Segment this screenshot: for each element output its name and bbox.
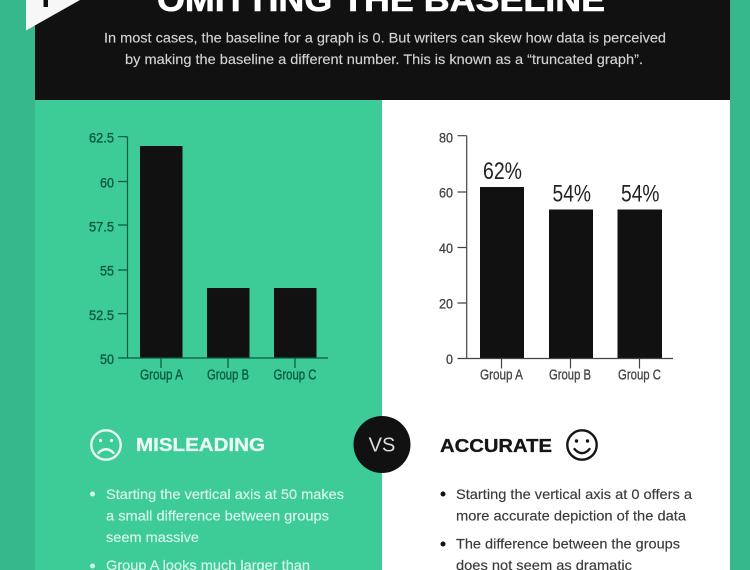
panel: header: [35, 0, 730, 100]
text block: intro: [104, 30, 666, 67]
bar chart: zero baseline: 20: [439, 296, 453, 312]
text block: accurate bullets: more accurate depiction of the data: [456, 508, 686, 524]
text block: misleading bullets: seem massive: [106, 529, 199, 545]
bar chart: zero baseline: 80: [439, 130, 453, 146]
icon: number ribbon: [26, 0, 80, 30]
text block: misleading bullets: [90, 486, 344, 570]
panel: accurate: [382, 100, 730, 570]
heading: misleading: MISLEADING: [136, 435, 265, 455]
bar chart: zero baseline: Group C: [618, 366, 661, 384]
bar chart: zero baseline: 54%: [621, 180, 660, 208]
bar chart: zero baseline: [439, 130, 673, 384]
text block: accurate bullets: [440, 486, 692, 570]
bar chart: truncated baseline: 55: [100, 263, 114, 279]
bar chart: truncated baseline: 57.5: [89, 218, 114, 234]
bar chart: zero baseline: Group B: [549, 366, 591, 384]
badge: vs: [354, 416, 410, 473]
icon: sad face: [91, 430, 121, 460]
panel: misleading: [35, 100, 382, 570]
bar chart: zero baseline: 54%: [552, 180, 591, 208]
bar chart: truncated baseline: 62.5: [89, 130, 114, 146]
bar chart: zero baseline: 62%: [483, 158, 522, 185]
bar chart: zero baseline: Group A: [480, 366, 523, 384]
text block: accurate bullets: The difference between the groups: [456, 536, 680, 552]
icon: happy face: [567, 430, 597, 460]
text block: accurate bullets: Starting the vertical axis at 0 offers a: [456, 486, 692, 502]
bar chart: zero baseline: 40: [439, 240, 453, 256]
text block: intro: In most cases, the baseline for a graph is 0. But writers can skew how data is perceived: [104, 30, 666, 46]
bar chart: truncated baseline: Group B: [207, 366, 249, 384]
heading: accurate: ACCURATE: [440, 436, 552, 456]
text block: intro: by making the baseline a different number. This is known as a “truncated graph”.: [125, 51, 643, 67]
bar chart: zero baseline: 0: [446, 351, 453, 367]
text block: misleading bullets: Starting the vertical axis at 50 makes: [106, 486, 344, 502]
bar chart: zero baseline: 60: [439, 185, 453, 201]
bar chart: truncated baseline: Group C: [274, 366, 317, 384]
text block: misleading bullets: a small difference between groups: [106, 508, 329, 524]
bar chart: truncated baseline: 60: [100, 175, 114, 191]
badge: vs: VS: [369, 434, 395, 456]
bar chart: truncated baseline: [89, 130, 328, 384]
bar chart: truncated baseline: 50: [100, 351, 114, 367]
bar chart: truncated baseline: 52.5: [89, 307, 114, 323]
bar chart: truncated baseline: Group A: [140, 366, 183, 384]
